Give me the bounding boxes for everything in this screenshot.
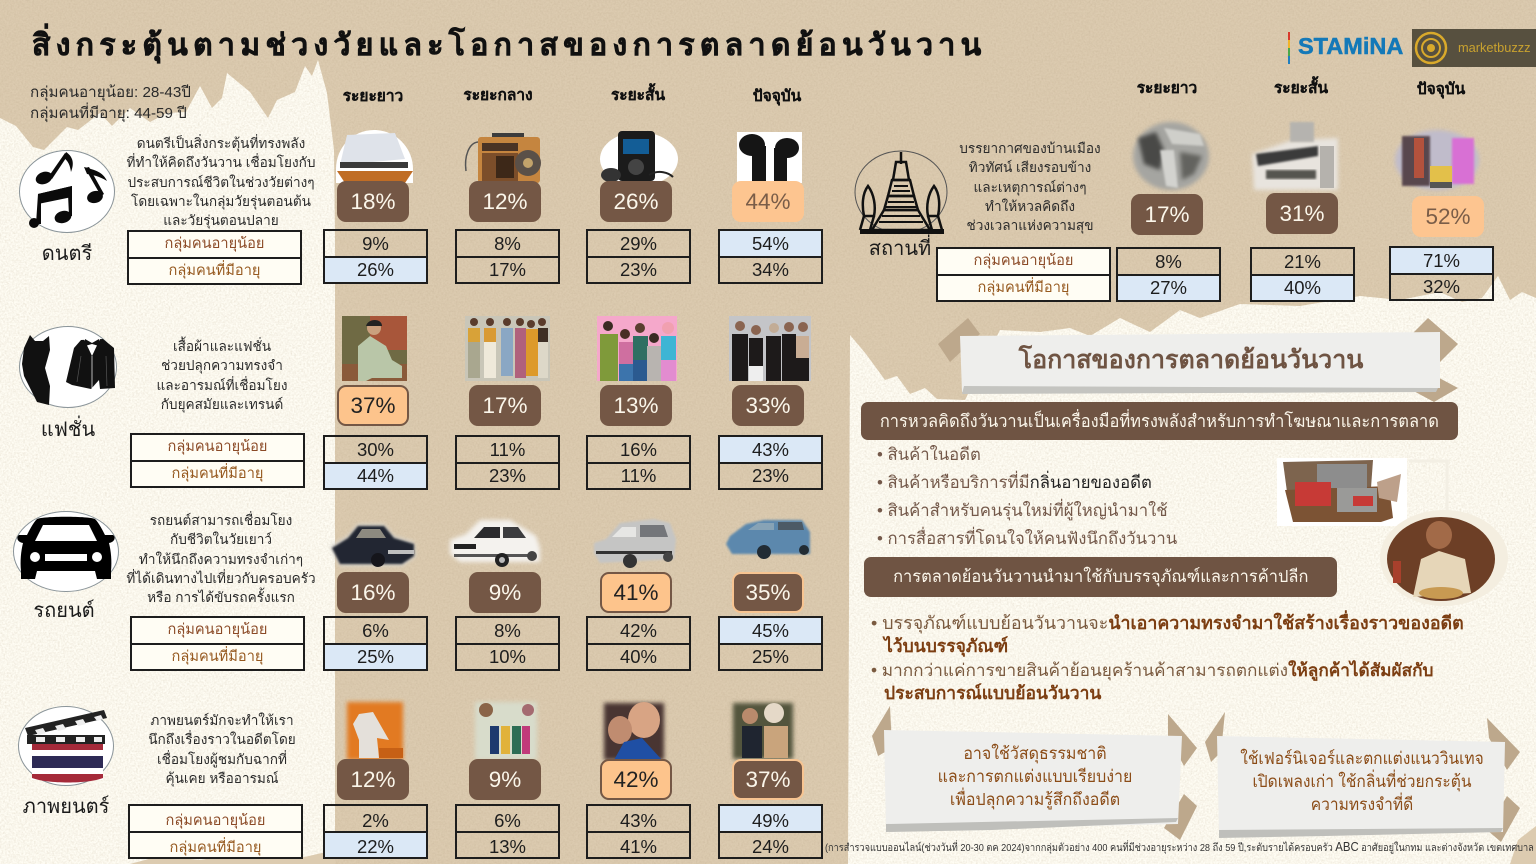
group labels: cars: กลุ่มคนที่มีอายุ [172,649,263,665]
value: 9% [469,759,541,800]
value: 13%: 13% [613,393,659,418]
description: cars: หรือ การได้ขับรถครั้งแรก [147,590,295,605]
column headings: left: ปัจจุบัน [753,88,801,105]
section: movies [18,698,823,859]
value: 42% [600,759,672,800]
table: 12% split: 2% [362,810,389,831]
text: packaging and retail bullets: • มากกว่าแค่การขายสินค้าย้อนยุคร้านค้าสามารถตกแต่งให้ลูกค้าได้สัมผัสกับ [871,660,1433,680]
table: 17% split [455,435,560,490]
value: 44% [732,181,804,222]
value: 17% [1131,194,1203,235]
image: blue SUV [725,518,812,559]
bar: nostalgia is a powerful tool [861,402,1458,440]
value: 35%: 35% [745,580,791,605]
value: 12% [469,181,541,222]
image: colourful fashion group [597,316,677,381]
table: 44% split: 34% [752,259,789,280]
description: music: โดยเฉพาะในกลุ่มวัยรุ่นตอนต้น [131,194,311,209]
value: 41%: 41% [613,580,659,605]
value: 9%: 9% [489,580,521,605]
text: packaging and retail bullets [871,612,1511,706]
bar: nostalgia is a powerful tool: การหวลคิดถึงวันวานเป็นเครื่องมือที่ทรงพลังสำหรับการทำโฆษณาและการตลาด [880,411,1439,431]
table: 52% split: 71% [1423,250,1460,271]
icon: temple [854,150,948,234]
banner: marketing opportunity heading [938,318,1458,402]
description: places: ทำให้หวลคิดถึง [985,199,1075,214]
bullet list: nostalgia products: • การสื่อสารที่โดนใจให้คนฟังนึกถึงวันวาน [877,529,1177,548]
group labels: fashion [130,433,305,488]
group labels: movies: กลุ่มคนอายุน้อย [166,813,265,829]
callout: natural materials [872,706,1198,840]
image: 70s fashion group [465,316,550,381]
label: places: สถานที่ [869,238,931,260]
table: 44% split: 54% [752,233,789,254]
image: children movie still [600,700,668,762]
description: movies: เชื่อมโยงผู้ชมกับฉากที่ [157,752,287,767]
table: 35% split [718,616,823,671]
callout text: อาจใช้วัสดุธรรมชาติ [963,744,1107,763]
table: 17% split: 27% [1150,277,1187,298]
table: 16% split: 25% [357,646,394,667]
text: packaging and retail bullets: • บรรจุภัณฑ์แบบย้อนวันวานจะนำเอาความทรงจำมาใช้สร้างเรื่องราวของอดีต [871,613,1464,633]
value: 33%: 33% [745,393,791,418]
table: 16% split: 6% [362,620,389,641]
image: vintage suitcase [1277,458,1449,548]
description: fashion: เสื้อผ้าและแฟชั่น [173,339,271,354]
table: 17% split: 8% [1155,251,1182,272]
table: 12% split: 22% [357,836,394,857]
table: 31% split [1250,247,1355,302]
column headings: left: ระยะกลาง [463,87,533,104]
value: 33% [732,385,804,426]
table: 42% split: 41% [620,836,657,857]
age group legend: กลุ่มคนอายุน้อย: 28-43ปี [30,84,191,101]
description: movies [148,712,296,787]
description: music: ประสบการณ์ชีวิตในช่วงวัยต่างๆ [127,175,315,190]
value: 9% [469,572,541,613]
description: places: ช่วงเวลาแห่งความสุข [966,218,1094,233]
heading text: โอกาสของการตลาดย้อนวันวาน [1019,346,1363,374]
table: 42% split [586,804,691,859]
section: cars [13,511,823,671]
callout: vintage furniture [1205,708,1521,848]
table: 26% split: 23% [620,259,657,280]
image: classic black car [330,522,417,568]
value: 12%: 12% [350,767,396,792]
description: places: และเหตุการณ์ต่างๆ [973,180,1086,195]
table: 9% split: 8% [494,620,521,641]
callout text [896,742,1174,811]
value: 35% [732,572,804,613]
image: earbuds [737,132,802,183]
tape decorations [938,318,1458,402]
value: 12%: 12% [482,189,528,214]
label: cars: รถยนต์ [33,600,95,622]
callout text: เปิดเพลงเก่า ใช้กลิ่นที่ช่วยกระตุ้น [1252,772,1472,791]
table: 13% split: 16% [620,439,657,460]
table: 33% split [718,435,823,490]
image: turntable [336,130,413,183]
table: 9% split: 13% [489,836,526,857]
callout text: ความทรงจำที่ดี [1311,795,1413,814]
bullet list: nostalgia products: • สินค้าสำหรับคนรุ่นใหม่ที่ผู้ใหญ่นำมาใช้ [877,501,1168,520]
text: packaging and retail bullets: ประสบการณ์แบบย้อนวันวาน [884,683,1101,703]
image: The King poster [344,698,406,760]
table: 13% split [586,435,691,490]
table: 37% split [323,435,428,490]
image: white sedan [448,518,542,567]
table: 42% split: 43% [620,810,657,831]
description: fashion: ช่วยปลุกความทรงจำ [161,358,283,373]
logo: STAMINA: STAMiNA [1298,33,1403,59]
description: music: ดนตรีเป็นสิ่งกระตุ้นที่ทรงพลัง [137,136,305,151]
description: music [126,134,315,229]
description: cars: ที่ได้เดินทางไปเที่ยวกับครอบครัว [126,571,316,586]
value: 26% [600,181,672,222]
callout paper and tape [1205,708,1521,848]
value: 37%: 37% [745,767,791,792]
label: music: ดนตรี [42,243,92,265]
description: movies: ภาพยนตร์มักจะทำให้เรา [150,713,294,728]
bar: packaging and retail: การตลาดย้อนวันวานนำมาใช้กับบรรจุภัณฑ์และการค้าปลีก [893,567,1308,586]
table: 12% split [323,804,428,859]
value: 37% [337,385,409,426]
description: cars: ทำให้นึกถึงความทรงจำเก่าๆ [139,552,303,567]
group labels: places: กลุ่มคนอายุน้อย [974,253,1073,269]
image: traditional dress [342,316,407,381]
group labels: cars: กลุ่มคนอายุน้อย [168,622,267,638]
column headings: place [1137,76,1466,99]
bullet list: nostalgia products [877,443,1207,551]
column headings: place: ปัจจุบัน [1417,81,1465,98]
value: 26%: 26% [613,189,659,214]
table: 37% split: 49% [752,810,789,831]
table: 33% split: 23% [752,465,789,486]
icon: Thai film clapperboard [18,706,114,786]
image: black fashion group [729,316,811,381]
table: 41% split: 42% [620,620,657,641]
callout text [1230,747,1494,816]
table: 18% split: 9% [362,233,389,254]
section: music [19,130,823,285]
table: 13% split: 11% [621,465,656,486]
table: 41% split [586,616,691,671]
description: fashion: กับยุคสมัยและเทรนด์ [161,397,283,412]
logo: marketbuzzz [1412,29,1536,67]
table: 52% split [1389,246,1494,301]
value: 12% [337,759,409,800]
table: 52% split: 32% [1423,276,1460,297]
image: movie still [730,700,796,762]
group labels: movies: กลุ่มคนที่มีอายุ [170,840,261,856]
section: places [854,120,1494,302]
image: man at table [1379,509,1509,607]
column headings: left: ระยะสั้น [611,87,665,104]
image: mp3 player [600,131,678,182]
value: 9%: 9% [489,767,521,792]
column headings: place: ระยะสั้น [1274,80,1328,97]
image: old cinema photo [1250,121,1340,192]
table: 31% split: 21% [1284,251,1321,272]
value: 16%: 16% [350,580,396,605]
section: fashion [19,316,823,490]
column headings: place: ระยะยาว [1137,80,1197,97]
bullet list: nostalgia products: • สินค้าในอดีต [877,445,981,464]
value: 17% [469,385,541,426]
table: 9% split [455,616,560,671]
description: cars [126,511,316,605]
callout text: เพื่อปลุกความรู้สึกถึงอดีต [950,790,1120,809]
group labels: cars [130,616,305,671]
table: 12% split [455,229,560,284]
group labels: music: กลุ่มคนที่มีอายุ [169,263,260,279]
table: 31% split: 40% [1284,277,1321,298]
table: 9% split: 6% [494,810,521,831]
group labels: movies [128,804,303,859]
description: music: และวัยรุ่นตอนปลาย [163,213,279,228]
group labels: fashion: กลุ่มคนอายุน้อย [168,439,267,455]
table: 12% split: 17% [489,259,526,280]
description: music: ที่ทำให้คิดถึงวันวาน เชื่อมโยงกับ [127,155,315,170]
callout text: และการตกแต่งแบบเรียบง่าย [938,767,1132,786]
table: 35% split: 45% [752,620,789,641]
table: 17% split [1116,247,1221,302]
value: 37%: 37% [350,393,396,418]
value: 37% [732,759,804,800]
table: 37% split [718,804,823,859]
table: 18% split [323,229,428,284]
table: 37% split: 44% [357,465,394,486]
icon: dress and tuxedo [19,326,117,408]
table: 26% split [586,229,691,284]
table: 18% split: 26% [357,259,394,280]
table: 35% split: 25% [752,646,789,667]
value: 18% [337,181,409,222]
description: movies: คุ้นเคย หรืออารมณ์ [166,771,278,786]
image: old canal photo [1131,120,1211,192]
label: fashion: แฟชั่น [41,419,95,441]
description: places: บรรยากาศของบ้านเมือง [959,141,1101,156]
callout paper and tape [872,706,1198,840]
description: places [959,141,1101,234]
description: fashion: และอารมณ์ที่เชื่อมโยง [157,378,287,393]
table: 37% split: 30% [357,439,394,460]
age group legend: กลุ่มคนที่มีอายุ: 44-59 ปี [30,104,187,122]
image: radio [464,133,541,183]
image: modern city street [1394,128,1480,192]
value: 17%: 17% [1144,202,1190,227]
image: group movie poster [474,700,538,760]
group labels: places [936,247,1111,302]
logo: marketbuzzz: marketbuzzz [1458,40,1531,55]
source footnote: (การสำรวจแบบออนไลน์(ช่วงวันที่ 20-30 ตค 2024)จากกลุ่มตัวอย่าง 400 คนที่มีช่วงอายุระหว่าง 28 ถึง 59 ปี,ระดับรายได้ครอบครัว ABC อาศัยอยู่ในกทม และต่างจังหวัด เขตเทศบาล [825,839,1534,854]
table: 12% split: 8% [494,233,521,254]
table: 9% split: 10% [489,646,526,667]
bar: packaging and retail [864,557,1337,597]
table: 9% split [455,804,560,859]
title: สิ่งกระตุ้นตามช่วงวัยและโอกาสของการตลาดย้อนวันวาน [32,29,987,62]
description: fashion [157,336,287,413]
column headings: left [343,83,802,106]
table: 17% split: 23% [489,465,526,486]
table: 37% split: 24% [752,836,789,857]
label: movies: ภาพยนตร์ [23,796,109,818]
value: 17%: 17% [482,393,528,418]
group labels: places: กลุ่มคนที่มีอายุ [978,280,1069,296]
description: cars: รถยนต์สามารถเชื่อมโยง [150,513,292,528]
group labels: music [127,230,302,285]
value: 31% [1266,193,1338,234]
icon: music notes [19,150,115,233]
icon: car [13,511,119,592]
age group legend [30,84,191,122]
value: 16% [337,572,409,613]
value: 18%: 18% [350,189,396,214]
description: movies: นึกถึงเรื่องราวในอดีตโดย [148,732,296,747]
table: 16% split [323,616,428,671]
table: 17% split: 11% [490,439,525,460]
value: 41% [600,572,672,613]
callout text: ใช้เฟอร์นิเจอร์และตกแต่งแนววินเทจ [1240,749,1484,768]
description: cars: กับชีวิตในวัยเยาว์ [170,532,272,547]
value: 52%: 52% [1425,204,1471,229]
value: 31%: 31% [1279,201,1325,226]
table: 33% split: 43% [752,439,789,460]
group labels: fashion: กลุ่มคนที่มีอายุ [172,466,263,482]
value: 52% [1412,196,1484,237]
value: 13% [600,385,672,426]
bullet list: nostalgia products: • สินค้าหรือบริการที่มีกลิ่นอายของอดีต [877,473,1152,492]
column headings: left: ระยะยาว [343,88,403,105]
value: 42%: 42% [613,767,659,792]
table: 41% split: 40% [620,646,657,667]
value: 44%: 44% [745,189,791,214]
description: places: ทิวทัศน์ เสียงรอบข้าง [969,160,1091,175]
image: silver MPV [594,518,676,568]
text: packaging and retail bullets: ไว้บนบรรจุภัณฑ์ [884,636,1008,656]
group labels: music: กลุ่มคนอายุน้อย [165,236,264,252]
table: 26% split: 29% [620,233,657,254]
table: 44% split [718,229,823,284]
